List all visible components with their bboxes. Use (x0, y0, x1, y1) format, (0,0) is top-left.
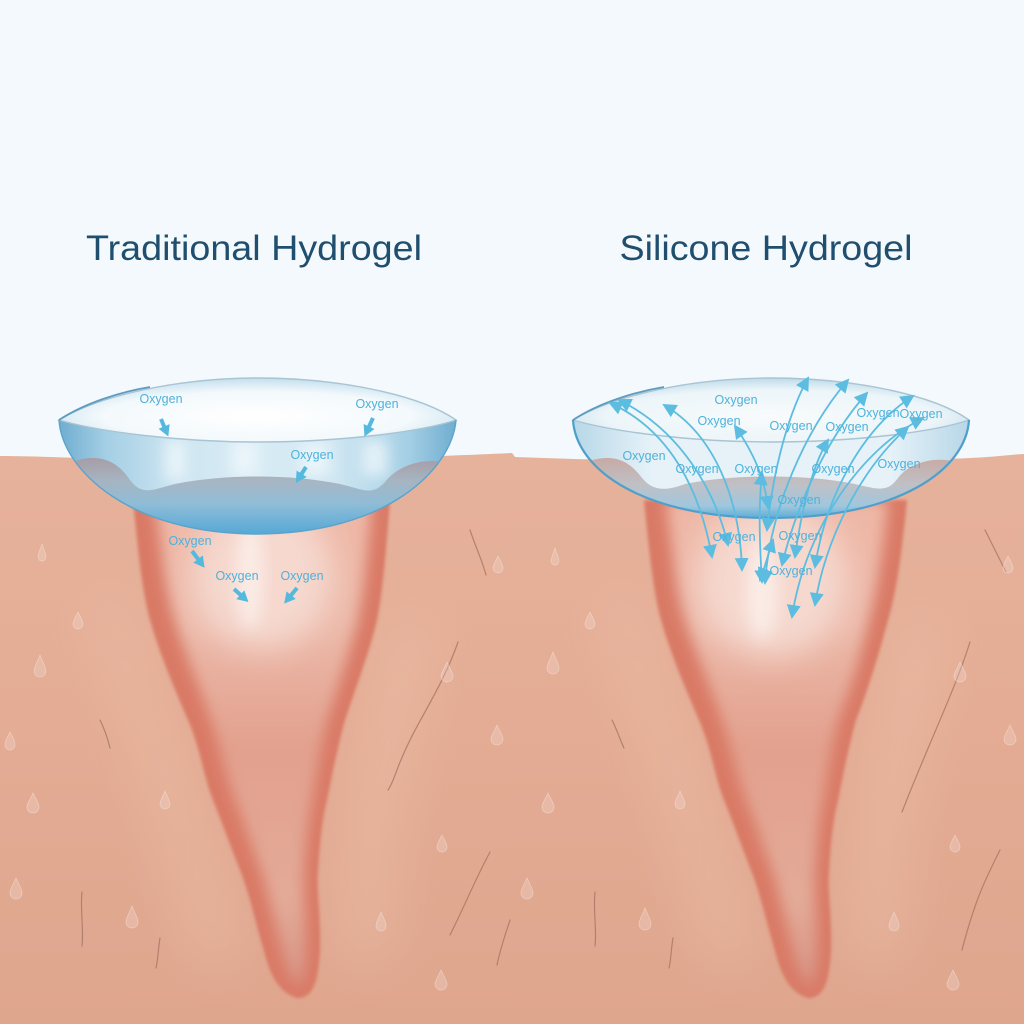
skin tissue (0, 453, 1024, 1024)
oxygen labels: Oxygen (778, 529, 822, 543)
contact lens (573, 378, 969, 518)
oxygen labels: Oxygen (769, 564, 813, 578)
oxygen labels and arrows: Oxygen (168, 534, 212, 548)
oxygen labels: Oxygen (714, 393, 758, 407)
oxygen labels and arrows (139, 392, 399, 599)
tear duct funnel (644, 500, 907, 998)
water droplets (5, 544, 1016, 990)
oxygen labels: Oxygen (825, 420, 869, 434)
hairs (81, 530, 1006, 968)
oxygen labels: Oxygen (697, 414, 741, 428)
oxygen labels (622, 393, 943, 578)
oxygen labels and arrows: Oxygen (215, 569, 259, 583)
contact lens (59, 378, 456, 534)
oxygen labels and arrows: Oxygen (290, 448, 334, 462)
oxygen labels: Oxygen (769, 419, 813, 433)
oxygen labels: Oxygen (734, 462, 778, 476)
oxygen labels: Oxygen (675, 462, 719, 476)
panel: silicone hydrogel (573, 229, 969, 998)
oxygen labels: Oxygen (811, 462, 855, 476)
oxygen labels and arrows: Oxygen (139, 392, 183, 406)
oxygen labels and arrows: Oxygen (280, 569, 324, 583)
oxygen labels: Oxygen (777, 493, 821, 507)
tear duct funnel (133, 500, 390, 998)
oxygen labels: Oxygen (856, 406, 900, 420)
oxygen labels: Oxygen (899, 407, 943, 421)
oxygen arrows (610, 378, 923, 617)
oxygen labels and arrows: Oxygen (355, 397, 399, 411)
oxygen labels: Oxygen (622, 449, 666, 463)
skin highlights around funnels (90, 600, 941, 960)
heading: silicone hydrogel: Silicone Hydrogel (620, 229, 912, 268)
panel: traditional hydrogel (59, 229, 456, 998)
heading: traditional hydrogel: Traditional Hydrogel (86, 229, 422, 268)
oxygen labels: Oxygen (712, 530, 756, 544)
oxygen labels: Oxygen (877, 457, 921, 471)
